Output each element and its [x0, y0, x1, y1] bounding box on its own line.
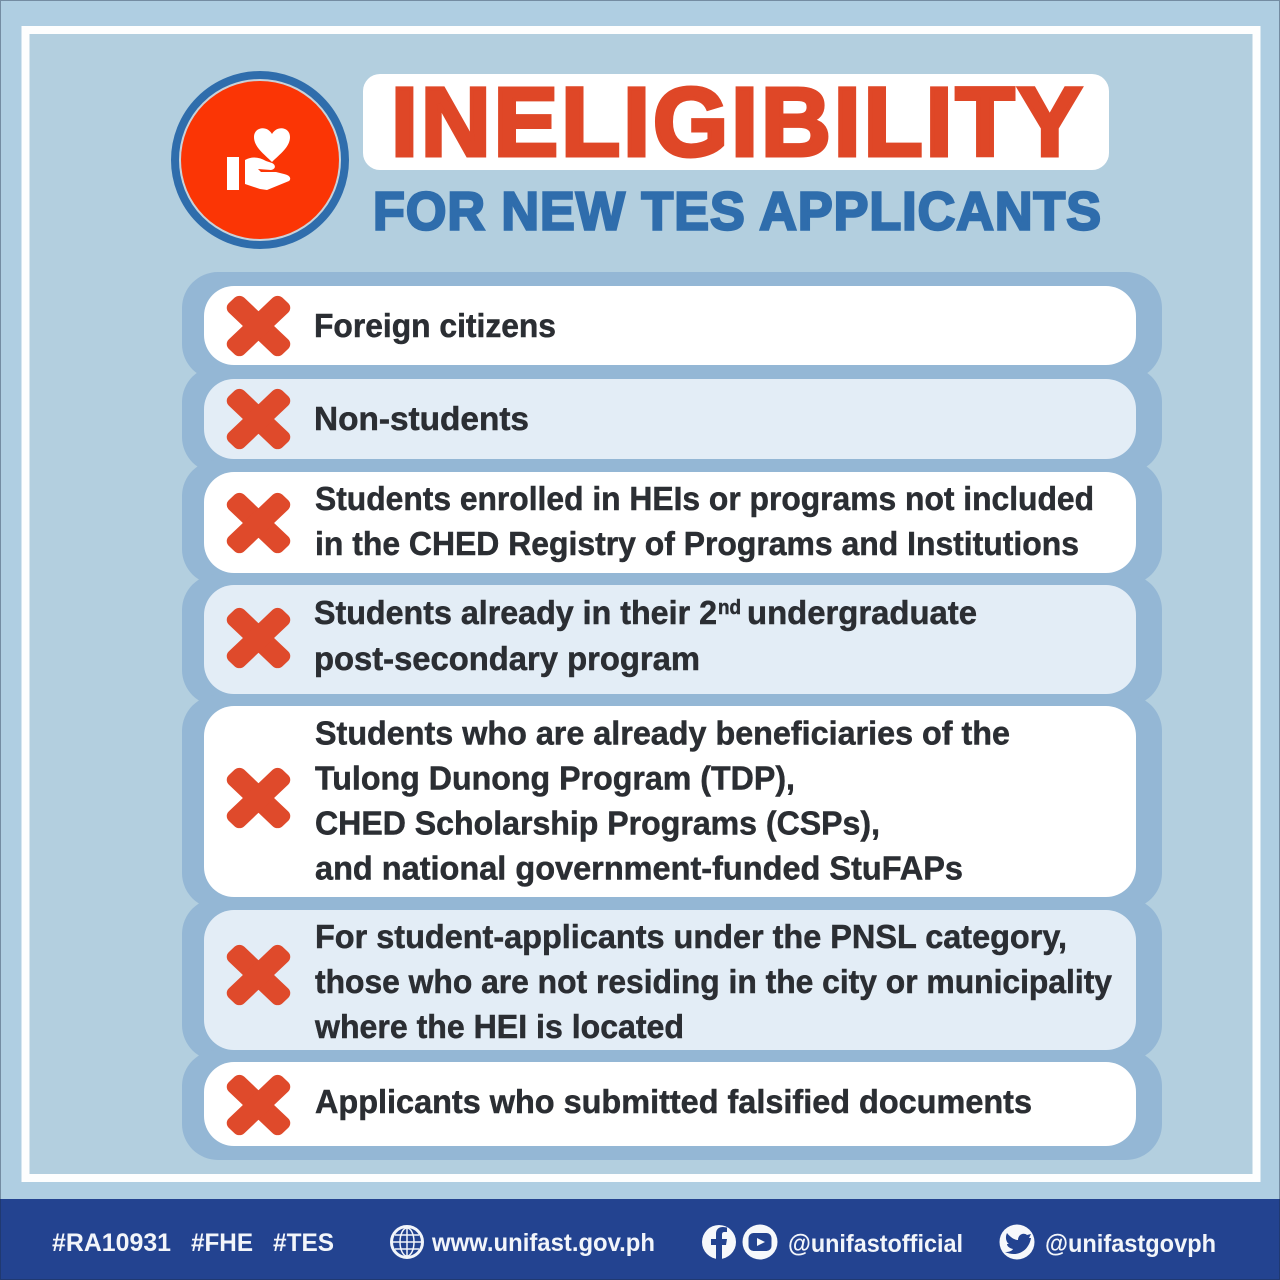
row 6: [204, 910, 1136, 1050]
row 4: [204, 585, 1136, 694]
hashtags: [52, 1229, 334, 1257]
hashtags: #TES: [273, 1229, 334, 1257]
row 3: in the CHED Registry of Programs and Institutions: [315, 525, 1079, 562]
row 5: Tulong Dunong Program (TDP),: [315, 760, 795, 796]
row 2: [204, 379, 1136, 459]
icon: globe: [392, 1226, 422, 1258]
row 7: Applicants who submitted falsified documents: [315, 1083, 1032, 1120]
row 1: [204, 286, 1136, 365]
header badge: hand holding heart: [175, 75, 345, 245]
facebook and youtube handle: @unifastofficial: [788, 1230, 963, 1258]
subtitle: FOR NEW TES APPLICANTS: [373, 182, 1102, 242]
icon: hand holding heart: [227, 128, 290, 190]
row 6: those who are not residing in the city or municipality: [315, 963, 1113, 1000]
row 6: For student-applicants under the PNSL category,: [315, 918, 1067, 955]
hashtags: #FHE: [191, 1229, 253, 1257]
icon: twitter: [1000, 1224, 1034, 1260]
panel: criteria list: [182, 272, 1162, 1160]
twitter handle: @unifastgovph: [1045, 1230, 1216, 1258]
row 7: [204, 1062, 1136, 1146]
row 4: Students already in their 2: [314, 594, 717, 631]
row 5: [204, 706, 1136, 897]
icon: facebook: [702, 1225, 736, 1259]
row 5: Students who are already beneficiaries of the: [315, 714, 1010, 752]
row 5: and national government-funded StuFAPs: [315, 850, 963, 886]
row 3: [204, 472, 1136, 573]
row 4: post-secondary program: [314, 640, 700, 677]
website: www.unifast.gov.ph: [431, 1229, 655, 1257]
row 5: CHED Scholarship Programs (CSPs),: [315, 804, 880, 842]
row 1: Foreign citizens: [314, 307, 556, 344]
row 2: Non-students: [314, 400, 529, 437]
panel backing: [182, 272, 1162, 1160]
hashtags: #RA10931: [52, 1229, 171, 1257]
footer bar: [0, 1199, 1280, 1280]
row 3: Students enrolled in HEIs or programs not included: [315, 480, 1094, 517]
row 4: nd: [718, 597, 741, 619]
row 4: undergraduate: [747, 594, 977, 631]
title: INELIGIBILITY: INELIGIBILITY: [391, 68, 1085, 176]
icon: youtube: [742, 1224, 778, 1260]
row 6: where the HEI is located: [314, 1008, 684, 1045]
